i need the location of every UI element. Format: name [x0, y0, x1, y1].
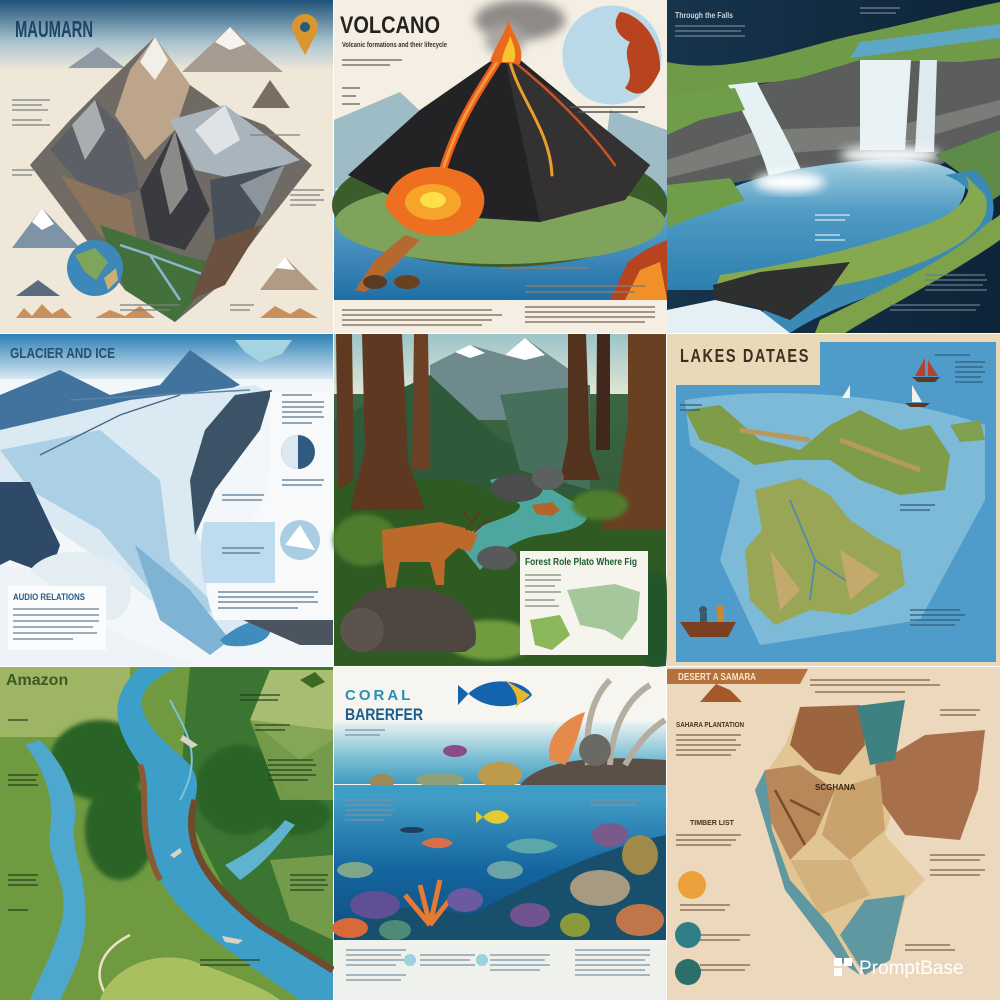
info box — [520, 551, 648, 655]
white rapids — [667, 300, 790, 333]
brown regions — [765, 705, 985, 915]
tree trunks — [336, 334, 666, 530]
glacier body — [0, 385, 275, 640]
title: waterfall: Through the Falls — [675, 11, 733, 20]
title banner — [667, 669, 808, 684]
lower green bank — [715, 175, 987, 300]
boats — [170, 735, 243, 944]
small peak inset — [16, 280, 60, 296]
round icons — [404, 954, 488, 966]
panel: coral — [332, 667, 666, 1000]
forest right — [180, 667, 333, 990]
right text panel — [206, 392, 333, 620]
sand and text — [334, 940, 666, 1000]
sea — [676, 342, 996, 662]
title: coral: CORAL — [345, 687, 413, 704]
icon: globe — [67, 240, 123, 296]
bottom text panel — [334, 300, 667, 333]
text notes — [12, 100, 324, 310]
lower track — [100, 935, 130, 1000]
cliff wall — [667, 58, 1000, 195]
deer — [382, 510, 490, 590]
sand map base — [755, 705, 925, 975]
distant peaks — [68, 27, 283, 72]
right forested bank — [935, 130, 1000, 205]
teal water regions — [755, 700, 905, 975]
lower clearing — [100, 957, 280, 1000]
left bank — [667, 88, 745, 228]
bar sparkline strip — [16, 304, 318, 318]
small deer — [532, 502, 560, 516]
subtitle: Volcanic formations and their lifecycle — [342, 42, 447, 49]
lava flows — [435, 60, 615, 200]
upper water band — [334, 722, 666, 784]
eruption flame — [490, 20, 521, 64]
side river — [225, 820, 295, 880]
small map — [530, 615, 570, 650]
smoke — [475, 0, 565, 56]
panel: waterfall — [667, 0, 1000, 333]
icon: location pin — [292, 14, 318, 55]
round icons — [675, 871, 706, 985]
panel: glacier — [0, 334, 333, 666]
caption under globe — [570, 107, 645, 112]
lower right green — [815, 215, 1000, 333]
rocky peaks — [225, 590, 333, 645]
iceberg inset — [235, 340, 292, 362]
top river — [850, 24, 1000, 58]
ferns — [333, 490, 673, 670]
upper landmass — [685, 405, 950, 495]
panel: amazon — [0, 667, 333, 1000]
small islands — [950, 420, 985, 442]
small purple fish — [443, 745, 467, 757]
lake — [667, 159, 965, 290]
waterfall centre — [860, 60, 911, 150]
caption box: AUDIO RELATIONS — [13, 592, 85, 602]
region label: SCGHANA — [815, 783, 856, 792]
title: amazon: Amazon — [6, 672, 68, 689]
small mountain inset right — [252, 80, 318, 290]
lava burst — [355, 167, 484, 292]
title: lakes: LAKES DATAES — [680, 346, 810, 366]
blue fish — [458, 680, 532, 708]
panel: desert — [667, 667, 1000, 1000]
main mountain range — [30, 37, 312, 322]
sailboats — [842, 358, 940, 407]
title banner: DESERT A SAMARA — [678, 672, 756, 683]
lower landmass — [745, 478, 905, 625]
main river — [117, 667, 333, 1000]
text notes — [218, 395, 324, 608]
caption box — [8, 586, 106, 650]
watermark icon — [834, 958, 852, 976]
curving river right — [750, 170, 994, 333]
map of usa — [567, 584, 640, 640]
text notes — [345, 730, 650, 980]
melt cave — [30, 552, 131, 620]
title: glacier: GLACIER AND ICE — [10, 345, 115, 362]
lower reef — [332, 823, 666, 945]
upper green plateau — [667, 2, 1000, 130]
right text block — [890, 275, 987, 310]
panel: lakes map — [667, 334, 1000, 666]
title: mountain: MAUMARN — [15, 16, 93, 42]
mist — [755, 145, 940, 192]
right rock wall — [190, 390, 272, 535]
box heading: Forest Role Plato Where Fig — [525, 557, 637, 568]
panel: forest — [333, 334, 673, 670]
deep sea — [334, 785, 666, 940]
panel: mountain — [0, 0, 333, 333]
forest blobs — [50, 720, 330, 880]
toucan logo — [300, 672, 325, 688]
left river — [25, 740, 85, 1000]
lower ice slope — [135, 545, 230, 655]
icon: rock formation — [700, 684, 742, 702]
upper reef — [370, 680, 666, 790]
fish — [400, 810, 558, 879]
panel: volcano — [332, 0, 668, 333]
parchment notes — [680, 355, 985, 625]
forest slopes — [334, 375, 590, 520]
sea — [334, 190, 667, 300]
boulders — [477, 466, 564, 570]
river bank — [140, 765, 160, 880]
notes — [676, 680, 985, 970]
forest floor — [334, 480, 666, 666]
lower lava inset — [610, 240, 667, 300]
snow foot — [0, 565, 200, 666]
light text clearing — [250, 720, 333, 940]
title line two: BARERFER — [345, 705, 423, 724]
globe inset — [562, 5, 662, 105]
distant hills — [334, 92, 667, 190]
left crevasse — [0, 482, 60, 575]
lake notes — [815, 215, 850, 240]
waterfall left — [728, 82, 805, 180]
rowing boat — [680, 605, 736, 637]
watermark: PromptBase — [859, 958, 964, 979]
island base — [332, 143, 668, 267]
lava sample icons — [363, 275, 420, 289]
far mountains — [0, 350, 240, 430]
coastal shallows — [685, 393, 985, 645]
circle insets — [280, 435, 320, 560]
bear — [340, 587, 476, 652]
snowy mountains — [430, 338, 590, 420]
rock rapids — [713, 262, 850, 320]
waterfall right — [915, 60, 937, 152]
small mountain inset — [12, 208, 80, 248]
left notes — [342, 60, 402, 104]
heading two: TIMBER LIST — [690, 820, 735, 827]
volcano cone — [348, 58, 650, 222]
top text lines — [675, 8, 900, 36]
river — [460, 477, 587, 570]
title: volcano: VOLCANO — [340, 12, 440, 39]
notes — [8, 695, 328, 965]
glacial lake — [220, 620, 271, 646]
headings: SAHARA PLANTATION — [676, 722, 744, 729]
